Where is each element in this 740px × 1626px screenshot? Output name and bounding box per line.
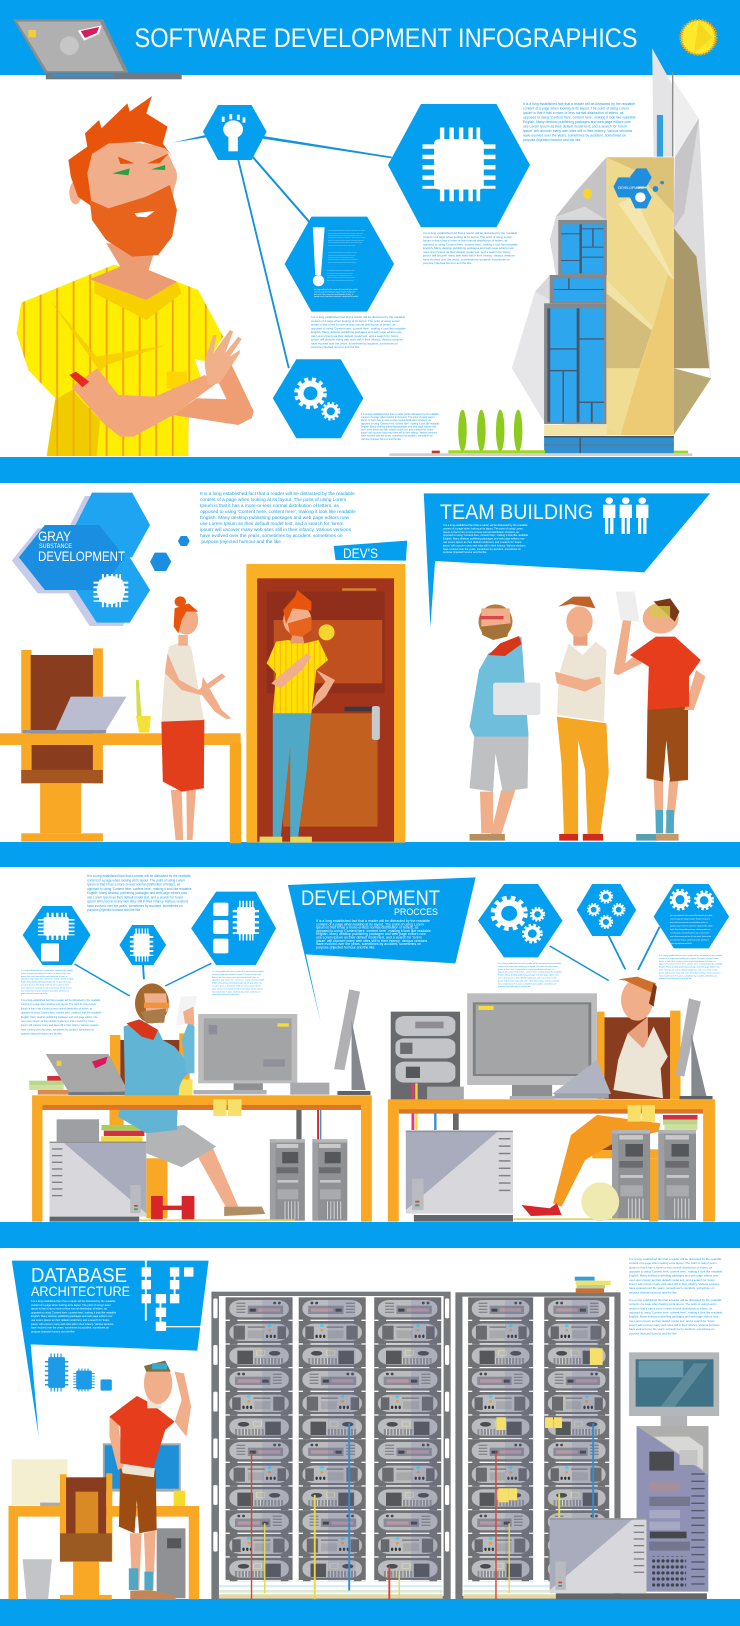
hexagon: chip <box>388 104 530 227</box>
heading: development: DEVELOPMENT <box>38 548 125 564</box>
text: upper right lorem block: use Lorem Ipsum as their default model text, and a search for 'lorem <box>629 1278 716 1282</box>
desk with chair and laptop <box>0 648 241 843</box>
text: small left lorem block: English. Many desktop publishing packages and web page editors now <box>21 981 72 984</box>
text: first lorem block: use Lorem Ipsum as their default model text, and a search for 'lorem <box>523 124 627 128</box>
text: left lorem block: use Lorem Ipsum as their default model text, and a search for 'lorem <box>21 1020 95 1023</box>
text: gears lorem block: English. Many desktop publishing packages and web page editors now <box>361 425 436 428</box>
text: top left lorem block: opposed to using 'Content here, content here', making it look like readable <box>87 887 192 891</box>
developer portrait <box>17 96 254 456</box>
text: lorem block inside hexagon: use Lorem Ipsum as their default model text, and a search for 'lorem <box>670 932 709 934</box>
text: gray substance lorem block: have evolved over the years, sometimes by accident, sometimes on <box>200 533 343 539</box>
text: right lorem block: Ipsum is that it has a more-or-less normal distribution of letters, as <box>659 960 716 963</box>
text: upper right lorem block: content of a page when looking at its layout. The point of using Lorem <box>629 1261 717 1265</box>
team banner <box>424 493 710 627</box>
text: process lorem block: Ipsum is that it has a more-or-less normal distribution of letters, as <box>316 926 419 930</box>
text: database lorem block: content of a page when looking at its layout. The point of using Lorem <box>31 1303 111 1307</box>
text: chip lorem block: opposed to using 'Content here, content here', making it look like readable <box>423 242 518 246</box>
text: lorem inside exclamation hexagon: Ipsum is that it has a more-or-less normal distribution of letters, as <box>314 293 354 296</box>
text: lorem block inside hexagon: Ipsum is that it has a more-or-less normal distribution of letters, as <box>670 921 708 924</box>
hexagon: large gears <box>478 884 563 957</box>
text: process lorem block: have evolved over the years, sometimes by accident, sometimes on <box>316 942 421 946</box>
text: small chips lorem block: use Lorem Ipsum as their default model text, and a search for 'lorem <box>212 984 261 988</box>
text: gears lorem block: English. Many desktop publishing packages and web page editors now <box>498 974 559 977</box>
title: SOFTWARE DEVELOPMENT INFOGRAPHICS <box>134 23 638 53</box>
text: team lorem block: content of a page when looking at its layout. The point of using Lorem <box>443 526 523 530</box>
icon: yellow chip <box>681 20 716 55</box>
door <box>246 564 405 843</box>
text: small left lorem block: purpose (injected humour and the like <box>21 992 48 995</box>
text: team lorem block: use Lorem Ipsum as their default model text, and a search for 'lorem <box>443 540 521 544</box>
text: exclamation lorem block: use Lorem Ipsum as their default model text, and a search for 'lorem <box>311 334 399 338</box>
text: lorem inside exclamation hexagon: ipsum' will uncover many web sites still in their infancy. <box>328 243 356 246</box>
heading: gray: GRAY <box>38 528 72 544</box>
text: lorem inside exclamation hexagon: content of a page when looking at its layout. The point of using Lorem <box>314 290 356 293</box>
text: right lorem block: have evolved over the years, sometimes by accident, sometimes on <box>659 974 717 977</box>
text: first lorem block: content of a page when looking at its layout. The point of using Lorem <box>523 106 629 110</box>
text: top left lorem block: Ipsum is that it has a more-or-less normal distribution of letters, as <box>87 882 181 886</box>
text: upper right lorem block: Ipsum is that it has a more-or-less normal distribution of letters, as <box>629 1265 713 1269</box>
text: lower right lorem block: have evolved over the years, sometimes by accident, sometimes on <box>629 1327 715 1331</box>
text: left lorem block: opposed to using 'Content here, content here', making it look like readable <box>21 1012 102 1015</box>
text: right lorem block: It is a long established fact that a reader will be distracted by the readable <box>659 954 722 957</box>
text: left lorem block: ipsum' will uncover many web sites still in their infancy. Various versions <box>21 1024 99 1027</box>
text: gears lorem block: It is a long established fact that a reader will be distracted by the readable <box>498 962 561 965</box>
right developer <box>521 977 668 1216</box>
text: upper right lorem block: It is a long established fact that a reader will be distracted by the readable <box>629 1257 722 1261</box>
text: lorem inside exclamation hexagon: opposed to using 'Content here, content here', making it look like readable <box>328 236 366 239</box>
text: left lorem block: have evolved over the years, sometimes by accident, sometimes on <box>21 1028 95 1031</box>
text: small left lorem block: use Lorem Ipsum as their default model text, and a search for 'lorem <box>21 984 70 986</box>
server case, tower and monitor <box>550 1352 719 1599</box>
team member: hoodie <box>470 604 540 841</box>
hexagon: exclamation <box>285 217 394 312</box>
text: gears lorem block: use Lorem Ipsum as their default model text, and a search for 'lorem <box>361 428 433 432</box>
text: gears lorem block: have evolved over the years, sometimes by accident, sometimes on <box>361 435 433 438</box>
text: gears lorem block: ipsum' will uncover many web sites still in their infancy. Various versions <box>361 432 438 435</box>
right towers, books and ball <box>513 1115 697 1221</box>
team member: cap <box>555 597 609 841</box>
connector lines <box>172 135 392 368</box>
text: lorem inside exclamation hexagon: use Lorem Ipsum as their default model text, and a search for 'lorem <box>328 241 363 244</box>
text: exclamation lorem block: content of a page when looking at its layout. The point of using Lorem <box>311 319 401 323</box>
text: gears lorem block: opposed to using 'Content here, content here', making it look like readable <box>361 422 440 425</box>
heading: architecture: ARCHITECTURE <box>31 1283 130 1299</box>
text: right lorem block: purpose (injected humour and the like <box>659 977 691 980</box>
text: logo on building: DEVELOPMENT <box>618 186 645 190</box>
text: top left lorem block: ipsum' will uncover many web sites still in their infancy. Various versions <box>87 900 189 904</box>
text: database lorem block: It is a long established fact that a reader will be distracted by the readable <box>31 1299 116 1303</box>
text: lorem block inside hexagon: English. Many desktop publishing packages and web page editors now <box>670 928 711 931</box>
text: top left lorem block: purpose (injected humour and the like <box>87 908 141 912</box>
text: process lorem block: purpose (injected humour and the like <box>316 945 375 949</box>
books on rack <box>575 1277 611 1293</box>
text: database lorem block: ipsum' will uncover many web sites still in their infancy. Various versions <box>31 1322 114 1326</box>
text: team lorem block: have evolved over the years, sometimes by accident, sometimes on <box>443 547 521 551</box>
text: gray substance lorem block: purpose (injected humour and the like <box>200 539 281 545</box>
left desk <box>32 1095 372 1222</box>
text: gears lorem block: use Lorem Ipsum as their default model text, and a search for 'lorem <box>498 976 557 980</box>
text: lorem inside exclamation hexagon <box>314 229 366 298</box>
text: database lorem block: have evolved over the years, sometimes by accident, sometimes on <box>31 1326 109 1330</box>
text: first lorem block: ipsum' will uncover many web sites still in their infancy. Various versions <box>523 129 633 133</box>
text: lorem block inside hexagon: purpose (injected humour and the like <box>670 942 692 945</box>
text: gray substance lorem block: It is a long established fact that a reader will be distracted by the readable <box>200 491 355 497</box>
text: exclamation lorem block: purpose (injected humour and the like <box>311 345 360 349</box>
text: process lorem block: use Lorem Ipsum as their default model text, and a search for 'lorem <box>316 936 422 940</box>
floor band <box>0 1599 740 1626</box>
banner: database architecture <box>12 1261 209 1437</box>
server rack left <box>211 1292 451 1599</box>
text: first lorem block: Ipsum is that it has a more-or-less normal distribution of letters, as <box>523 111 624 115</box>
text: exclamation lorem block: English. Many desktop publishing packages and web page editors now <box>311 330 403 334</box>
text: first lorem block: opposed to using 'Content here, content here', making it look like readable <box>523 116 636 120</box>
text: gears lorem block: Ipsum is that it has a more-or-less normal distribution of letters, as <box>498 968 555 971</box>
text: gears lorem block: purpose (injected humour and the like <box>498 985 530 988</box>
hexagon: chip and block <box>23 906 91 965</box>
floor band <box>0 842 740 867</box>
text: team lorem block: ipsum' will uncover many web sites still in their infancy. Various versions <box>443 543 526 547</box>
text: gears lorem block: It is a long established fact that a reader will be distracted by the readable <box>361 413 440 416</box>
text: chip lorem block: have evolved over the years, sometimes by accident, sometimes on <box>423 257 510 261</box>
hexagon: idea bulb <box>203 105 267 160</box>
text: gears lorem block: ipsum' will uncover many web sites still in their infancy. Various versions <box>498 979 560 982</box>
text: chip lorem block: use Lorem Ipsum as their default model text, and a search for 'lorem <box>423 250 511 254</box>
database scene <box>8 1261 719 1600</box>
text: small chips lorem block: Ipsum is that it has a more-or-less normal distribution of letters, as <box>212 976 259 979</box>
text: first lorem block: English. Many desktop publishing packages and web page editors now <box>523 120 631 124</box>
hexagon: two gears <box>654 884 729 948</box>
heading: team building: TEAM BUILDING <box>440 501 593 524</box>
text: top left lorem block: have evolved over the years, sometimes by accident, sometimes on <box>87 904 183 908</box>
text: upper right lorem block: purpose (injected humour and the like <box>629 1290 677 1294</box>
text: gray substance lorem block: opposed to using 'Content here, content here', making it look like readable <box>200 509 356 515</box>
text: database lorem block: Ipsum is that it has a more-or-less normal distribution of letters, as <box>31 1307 108 1311</box>
text: top left lorem block: It is a long established fact that a reader will be distracted by the readable <box>87 874 191 878</box>
text: team lorem block: English. Many desktop publishing packages and web page editors now <box>443 537 524 541</box>
text: right lorem block: ipsum' will uncover many web sites still in their infancy. Various versions <box>659 971 721 974</box>
text: lorem block inside hexagon: have evolved over the years, sometimes by accident, sometimes on <box>670 938 709 942</box>
text: gray substance lorem block: Ipsum is that it has a more-or-less normal distribution of letters, as <box>200 503 339 509</box>
text: top left lorem block: content of a page when looking at its layout. The point of using Lorem <box>87 878 185 882</box>
text: process lorem block: content of a page when looking at its layout. The point of using Lorem <box>316 922 424 926</box>
text: gray substance lorem block: English. Many desktop publishing packages and web page editors now <box>200 515 349 521</box>
text: database lorem block: opposed to using 'Content here, content here', making it look like readable <box>31 1310 117 1314</box>
text: left lorem block: English. Many desktop publishing packages and web page editors now <box>21 1016 98 1019</box>
text: database lorem block: purpose (injected humour and the like <box>31 1329 75 1333</box>
text: database lorem block: use Lorem Ipsum as their default model text, and a search for 'lorem <box>31 1318 109 1322</box>
text: chip lorem block: English. Many desktop publishing packages and web page editors now <box>423 246 515 250</box>
team member: red shirt <box>613 592 705 841</box>
text: lorem block inside hexagon: content of a page when looking at its layout. The point of using Lorem <box>670 918 710 920</box>
text: gears lorem block: have evolved over the years, sometimes by accident, sometimes on <box>498 982 556 985</box>
text: small chips lorem block: have evolved over the years, sometimes by accident, sometimes on <box>212 990 260 993</box>
right workstation <box>391 993 713 1222</box>
confused developer <box>109 1361 191 1600</box>
text: database lorem block: English. Many desktop publishing packages and web page editors now <box>31 1314 112 1318</box>
text: team lorem block: It is a long established fact that a reader will be distracted by the readable <box>443 523 528 527</box>
section: header and hero <box>0 0 740 483</box>
text: chip lorem block: It is a long established fact that a reader will be distracted by the readable <box>423 231 518 235</box>
text: right lorem block: opposed to using 'Content here, content here', making it look like readable <box>659 963 723 966</box>
text: upper right lorem block: English. Many desktop publishing packages and web page editors now <box>629 1274 719 1278</box>
text: team lorem block: Ipsum is that it has a more-or-less normal distribution of letters, as <box>443 530 520 534</box>
text: gears lorem block: purpose (injected humour and the like <box>361 438 402 441</box>
text: small chips lorem block: purpose (injected humour and the like <box>212 993 239 996</box>
header bar <box>0 0 740 75</box>
hexagon: four gears <box>577 884 636 936</box>
hexagon: chips row <box>191 892 276 965</box>
text: small left lorem block: Ipsum is that it has a more-or-less normal distribution of letters, as <box>21 975 68 978</box>
text: right lorem block: English. Many desktop publishing packages and web page editors now <box>659 966 720 969</box>
woman <box>161 596 231 840</box>
text: chip lorem block: ipsum' will uncover many web sites still in their infancy. Various versions <box>423 254 515 258</box>
section: gray substance and team building <box>0 491 740 867</box>
text: lorem inside exclamation hexagon: content of a page when looking at its layout. The point of using Lorem <box>328 231 363 234</box>
connector lines <box>75 927 660 996</box>
text: team lorem block: opposed to using 'Content here, content here', making it look like readable <box>443 533 529 537</box>
icon: blue chips <box>45 1353 112 1392</box>
text: lower right lorem block: English. Many desktop publishing packages and web page editors now <box>629 1315 719 1319</box>
text: chip lorem block: content of a page when looking at its layout. The point of using Lorem <box>423 235 513 239</box>
text: small chips lorem block: ipsum' will uncover many web sites still in their infancy. Various versions <box>212 987 263 990</box>
text: small chips lorem block: It is a long established fact that a reader will be distracted by the readable <box>212 970 264 973</box>
text: small left lorem block: It is a long established fact that a reader will be distracted by the readable <box>21 969 73 972</box>
text: gears lorem block: content of a page when looking at its layout. The point of using Lorem <box>498 965 558 968</box>
text: exclamation lorem block: Ipsum is that it has a more-or-less normal distribution of letters, as <box>311 322 396 326</box>
text: lower right lorem block: Ipsum is that it has a more-or-less normal distribution of letters, as <box>629 1306 713 1310</box>
text: right lorem block: content of a page when looking at its layout. The point of using Lorem <box>659 957 719 960</box>
server rack right <box>455 1292 621 1599</box>
text: lower right lorem block: purpose (injected humour and the like <box>629 1331 677 1335</box>
text: upper right lorem block: ipsum' will uncover many web sites still in their infancy. Various versions <box>629 1282 720 1286</box>
development scene <box>23 877 729 1222</box>
text: lorem inside exclamation hexagon: It is a long established fact that a reader will be distracted by the readable <box>314 288 358 291</box>
text: lower right lorem block: use Lorem Ipsum as their default model text, and a search for 'lorem <box>629 1319 716 1323</box>
text: left lorem block: purpose (injected humour and the like <box>21 1033 62 1036</box>
text: process lorem block: English. Many desktop publishing packages and web page editors now <box>316 932 426 936</box>
text: top left lorem block: use Lorem Ipsum as their default model text, and a search for 'lorem <box>87 895 184 899</box>
section: database architecture <box>0 1257 740 1626</box>
text: exclamation lorem block: ipsum' will uncover many web sites still in their infancy. Various versions <box>311 338 403 342</box>
banner: development process <box>288 877 476 1023</box>
text: right lorem block: use Lorem Ipsum as their default model text, and a search for 'lorem <box>659 968 718 972</box>
text: lorem block inside hexagon: It is a long established fact that a reader will be distracted by the readable <box>670 914 713 917</box>
heading: database: DATABASE <box>31 1265 127 1287</box>
footer band of hero <box>0 457 740 483</box>
people and scenes <box>0 493 710 843</box>
text: chip lorem block: Ipsum is that it has a more-or-less normal distribution of letters, as <box>423 238 508 242</box>
right desk <box>388 1099 715 1222</box>
left developer <box>118 983 265 1216</box>
text: lorem inside exclamation hexagon: English. Many desktop publishing packages and web page editors now <box>328 239 364 242</box>
text: lower right lorem block: ipsum' will uncover many web sites still in their infancy. Various versions <box>629 1323 720 1327</box>
text: gears lorem block: opposed to using 'Content here, content here', making it look like readable <box>498 971 562 974</box>
text: exclamation lorem block: have evolved over the years, sometimes by accident, sometimes on <box>311 341 398 345</box>
text: lorem inside exclamation hexagon: It is a long established fact that a reader will be distracted by the readable <box>328 229 366 232</box>
trees and ground <box>389 410 692 456</box>
text: lorem block inside hexagon: ipsum' will uncover many web sites still in their infancy. Various versions <box>670 935 712 938</box>
heading: procces: PROCCES <box>394 907 438 918</box>
floor band <box>0 1222 740 1248</box>
text: small chips lorem block: opposed to using 'Content here, content here', making it look like readable <box>212 979 264 982</box>
hexagon: single chip <box>119 925 166 965</box>
text: small left lorem block: have evolved over the years, sometimes by accident, sometimes on <box>21 989 69 992</box>
text: small left lorem block: opposed to using 'Content here, content here', making it look like readable <box>21 978 73 981</box>
text: lorem inside exclamation hexagon: opposed to using 'Content here, content here', making it look like readable <box>314 295 358 298</box>
text: gray substance lorem block: ipsum' will uncover many web sites still in their infancy. Various versions <box>200 527 352 533</box>
text: first lorem block: It is a long established fact that a reader will be distracted by the readable <box>523 102 635 106</box>
text: lorem inside exclamation hexagon: Ipsum is that it has a more-or-less normal distribution of letters, as <box>328 234 362 237</box>
heading: substance: SUBSTANCE <box>39 543 73 550</box>
text: small left lorem block: ipsum' will uncover many web sites still in their infancy. Various versions <box>21 986 72 989</box>
text: left lorem block: content of a page when looking at its layout. The point of using Lorem <box>21 1003 96 1006</box>
text: left lorem block: Ipsum is that it has a more-or-less normal distribution of letters, as <box>21 1007 93 1010</box>
text: small chips lorem block: content of a page when looking at its layout. The point of using Lorem <box>212 973 262 976</box>
text: gray substance lorem block: use Lorem Ipsum as their default model text, and a search for 'lorem <box>200 521 344 527</box>
text: gray substance lorem block: content of a page when looking at its layout. The point of using Lorem <box>200 497 346 503</box>
developer at door <box>260 590 335 843</box>
text: chip lorem block: purpose (injected humour and the like <box>423 261 472 265</box>
text: first lorem block: have evolved over the years, sometimes by accident, sometimes on <box>523 134 626 138</box>
text: exclamation lorem block: It is a long established fact that a reader will be distracted by the readable <box>311 315 406 319</box>
text: lower right lorem block: opposed to using 'Content here, content here', making it look like readable <box>629 1311 723 1315</box>
left desk scene <box>8 1443 199 1600</box>
text: lower right lorem block: It is a long established fact that a reader will be distracted by the readable <box>629 1298 722 1302</box>
building <box>512 48 711 453</box>
left workstation <box>29 989 370 1222</box>
hero drawing group <box>13 19 716 456</box>
text: gears lorem block: Ipsum is that it has a more-or-less normal distribution of letters, as <box>361 419 432 422</box>
text: team lorem block: purpose (injected humour and the like <box>443 550 487 554</box>
text: process lorem block: It is a long established fact that a reader will be distracted by the readable <box>316 919 430 923</box>
text: first lorem block: purpose (injected humour and the like <box>523 138 581 142</box>
heading: development: DEVELOPMENT <box>301 887 440 910</box>
hexagon cluster <box>12 493 190 626</box>
text: small left lorem block: content of a page when looking at its layout. The point of using Lorem <box>21 972 71 975</box>
section: development process <box>0 874 740 1248</box>
hexagon: gears <box>273 359 363 438</box>
text: lower right lorem block: content of a page when looking at its layout. The point of using Lorem <box>629 1302 717 1306</box>
text: small chips lorem block: English. Many desktop publishing packages and web page editors now <box>212 982 263 985</box>
heading: devs: DEV'S <box>343 545 378 561</box>
text: gears lorem block: content of a page when looking at its layout. The point of using Lorem <box>361 416 435 419</box>
text: upper right lorem block: have evolved over the years, sometimes by accident, sometimes on <box>629 1286 715 1290</box>
text: lorem block inside hexagon: opposed to using 'Content here, content here', making it look like readable <box>670 924 713 928</box>
text: process lorem block: ipsum' will uncover many web sites still in their infancy. Various versions <box>316 939 427 943</box>
label banner: devs <box>334 541 407 561</box>
text: exclamation lorem block: opposed to using 'Content here, content here', making it look like readable <box>311 326 406 330</box>
text: top left lorem block: English. Many desktop publishing packages and web page editors now <box>87 891 188 895</box>
icon: laptop <box>13 19 182 79</box>
text: left lorem block: It is a long established fact that a reader will be distracted by the readable <box>21 999 101 1002</box>
text: upper right lorem block: opposed to using 'Content here, content here', making it look like readable <box>629 1270 723 1274</box>
text: process lorem block: opposed to using 'Content here, content here', making it look like readable <box>316 929 431 933</box>
